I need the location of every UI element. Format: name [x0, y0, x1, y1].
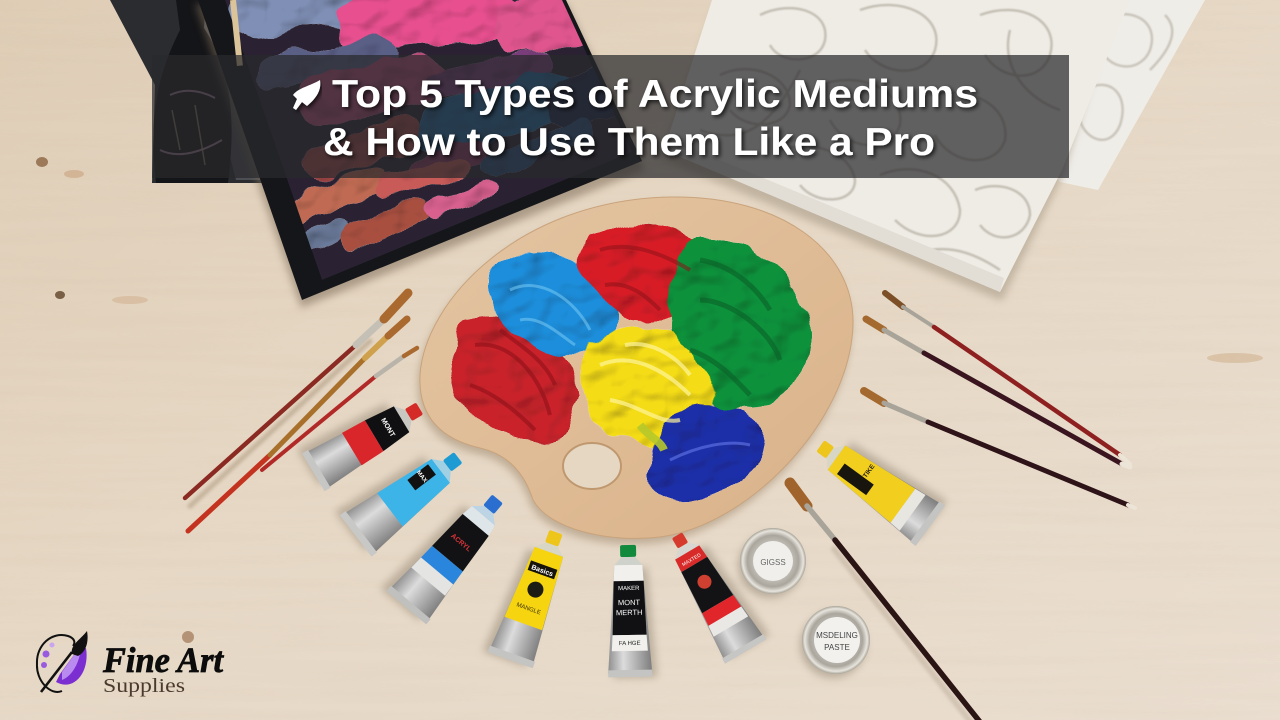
paint tube: yellow right: TIKE	[862, 463, 877, 479]
paint tube: red	[297, 384, 431, 492]
wooden stick	[230, 0, 243, 66]
brush: red handle	[185, 293, 408, 498]
brush: thin red handle	[262, 348, 417, 470]
brush: bottom long brush	[790, 483, 980, 720]
icon: pen nib	[293, 80, 320, 110]
palette thumb hole	[563, 443, 621, 489]
jar: modeling paste: PASTE	[824, 643, 850, 652]
paint tube: yellow right	[806, 422, 948, 546]
paint tube: red: MONT	[379, 417, 396, 439]
paint tube: black label: FA HGE	[619, 641, 641, 647]
brand name: Fine Art	[102, 640, 224, 680]
paint tube: black label: MAKER	[618, 586, 640, 592]
paint tube: red and black: MAXTED	[681, 552, 703, 568]
brushes left group	[185, 293, 417, 531]
paint tube: black label: MERTH	[616, 608, 643, 617]
jar: gloss	[738, 528, 806, 598]
jar: gloss: GIGSS	[760, 558, 786, 567]
brush: dark purple handle	[866, 319, 1130, 467]
title text	[323, 73, 978, 164]
canvas: dark abstract painting	[195, 0, 645, 308]
paint tube: ultramarine with black label: ACRYL	[449, 533, 473, 554]
canvas: back dark canvas with bottle	[110, 0, 280, 183]
paint tube: red and black	[656, 521, 771, 664]
paint blobs on palette	[451, 222, 813, 502]
paint tube: yellow: MANGLE	[515, 602, 541, 616]
brushes right group	[864, 293, 1135, 508]
brush: golden handle	[188, 319, 407, 531]
paint tube: black label	[606, 545, 657, 678]
paint tube: black label: MONT	[618, 598, 641, 607]
canvas: back white textured canvas	[1058, 0, 1205, 190]
brand subtitle: Supplies	[103, 675, 185, 697]
painter's palette	[418, 197, 853, 544]
title text: & How to Use Them Like a Pro	[323, 121, 935, 164]
title text: Top 5 Types of Acrylic Mediums	[332, 73, 978, 116]
paint tube: yellow: Basics	[530, 564, 554, 578]
title band	[152, 55, 1069, 178]
paint tube: light blue: MAX	[415, 470, 428, 484]
paint tube: light blue	[335, 432, 474, 558]
brush: maroon handle	[885, 293, 1130, 464]
brush: dark handle	[864, 391, 1135, 508]
jar: modeling paste: MSDELING	[816, 631, 858, 640]
logo: Fine Art Supplies	[37, 631, 224, 697]
icon: palette and brush	[37, 631, 88, 692]
paint tube: yellow	[483, 522, 579, 669]
paint tube: ultramarine with black label	[380, 478, 517, 626]
jar: modeling paste	[800, 606, 870, 678]
canvas: white textured canvas	[660, 0, 1130, 301]
